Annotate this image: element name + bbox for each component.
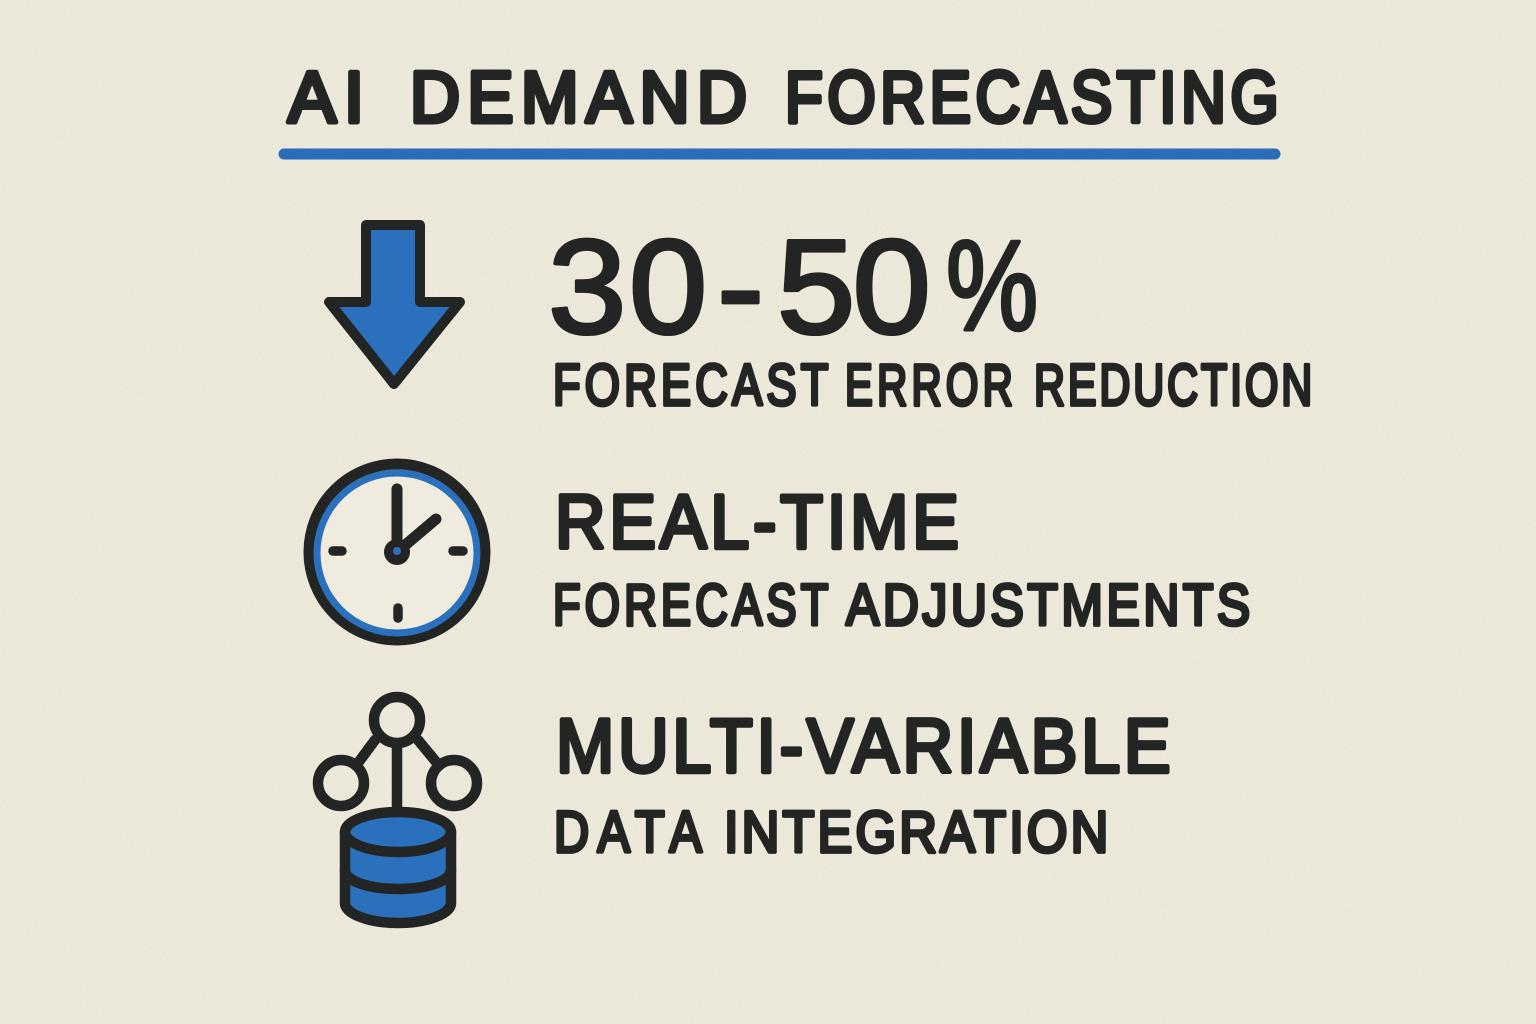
stat value: REAL-TIME [555, 480, 959, 565]
stat label [553, 574, 1250, 638]
stat label: ERROR [845, 352, 1013, 418]
icon: down arrow [329, 225, 460, 384]
stat label: ADJUSTMENTS [846, 574, 1250, 638]
stat value: % [946, 215, 1038, 357]
stat value: 30-50 [548, 213, 931, 362]
stat label [554, 799, 1108, 865]
stat value: MULTI-VARIABLE [556, 704, 1171, 789]
stat label: DATA [554, 801, 702, 865]
icon: clock [309, 464, 485, 640]
stat label: REDUCTION [1034, 353, 1312, 418]
title underline [284, 148, 1275, 160]
title [288, 57, 1279, 138]
stat label: FORECAST [553, 354, 828, 418]
title: FORECASTING [785, 58, 1279, 138]
icon: data network and database [318, 697, 477, 923]
stat: forecast error reduction [548, 213, 1312, 418]
stat: real-time forecast adjustments [553, 480, 1250, 638]
title: AI [288, 58, 364, 138]
stat label: FORECAST [553, 574, 828, 638]
stat label [553, 352, 1312, 418]
title: DEMAND [410, 57, 747, 137]
stat label: INTEGRATION [724, 799, 1108, 865]
stat: multi-variable data integration [554, 704, 1171, 865]
